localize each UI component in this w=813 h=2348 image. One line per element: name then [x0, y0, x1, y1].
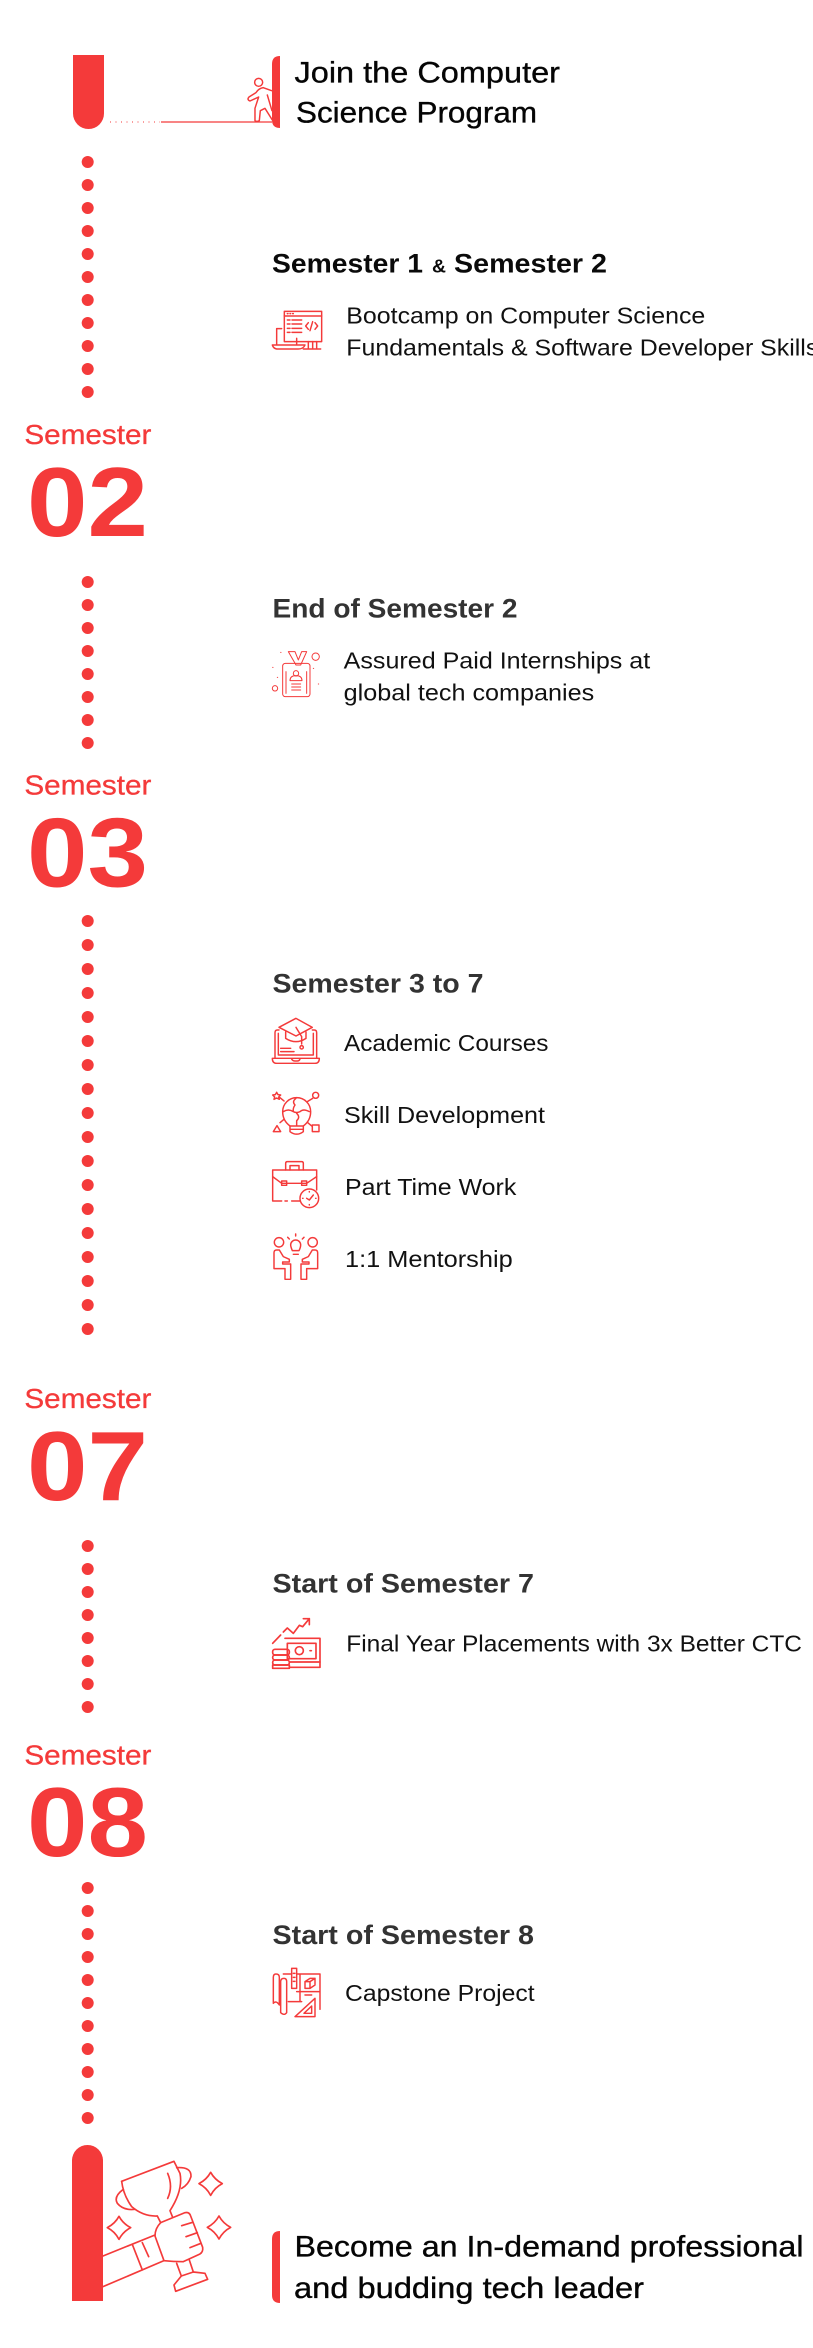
- description: Fundamentals & Software Developer Skills: [346, 335, 813, 361]
- timeline start cap: [73, 55, 104, 129]
- description: Capstone Project: [345, 1980, 535, 2006]
- icon: blueprint and set square: [273, 1968, 320, 2017]
- heading: Semester 3 to 7: [272, 969, 484, 999]
- icon: laptop with graduation cap: [272, 1018, 319, 1063]
- description: Assured Paid Internships at: [344, 647, 651, 673]
- panel: join the program: [73, 55, 560, 130]
- timeline end cap: [72, 2145, 103, 2301]
- connector line: [110, 121, 272, 123]
- heading: become an in-demand professional and budding tech leader: and budding tech leader: [294, 2272, 644, 2305]
- semester 08 marker: [24, 1739, 151, 1877]
- semester 02 marker: [24, 419, 151, 557]
- number: 08: [27, 1767, 148, 1877]
- number: 07: [27, 1411, 148, 1521]
- semester 03 marker: [24, 770, 151, 908]
- panel: start of semester 7: [272, 1569, 802, 1668]
- panel: semester 1 and semester 2: [272, 249, 813, 361]
- accent bar: [272, 56, 280, 128]
- heading: Start of Semester 7: [272, 1569, 534, 1599]
- accent bar: [272, 2231, 280, 2303]
- dotted timeline 4: [82, 1540, 94, 1713]
- number: 02: [27, 447, 148, 557]
- icon: briefcase with clock: [273, 1162, 319, 1208]
- item: 1:1 mentorship: 1:1 Mentorship: [345, 1246, 513, 1272]
- semester 07 marker: [24, 1383, 151, 1521]
- icon: id badge: [272, 652, 319, 697]
- label: Semester: [24, 1739, 151, 1770]
- icon: hand holding trophy: [103, 2161, 231, 2291]
- icon: person walking through door: [248, 78, 272, 121]
- icon: mentorship: [274, 1234, 318, 1279]
- icon: code window and laptop: [272, 311, 322, 349]
- heading: Semester 2: [454, 249, 607, 279]
- number: 03: [27, 798, 148, 908]
- dotted timeline 1: [82, 156, 94, 398]
- heading: End of Semester 2: [272, 593, 518, 623]
- panel: semester 3 to 7: [272, 969, 548, 1279]
- panel: become an in-demand professional: [72, 2145, 804, 2305]
- heading: join the computer science program: Join the Computer: [294, 57, 560, 90]
- panel: start of semester 8: [272, 1920, 535, 2017]
- description: Final Year Placements with 3x Better CTC: [346, 1631, 802, 1657]
- label: Semester: [24, 770, 151, 801]
- description: global tech companies: [344, 680, 594, 706]
- heading: &: [432, 257, 446, 277]
- description: Bootcamp on Computer Science: [346, 302, 705, 328]
- dotted timeline 3: [82, 915, 94, 1335]
- dotted timeline 5: [82, 1882, 94, 2124]
- icon: lightbulb with puzzle pieces: [273, 1092, 319, 1134]
- icon: money with growth arrow: [273, 1619, 320, 1668]
- label: Semester: [24, 1383, 151, 1414]
- heading: become an in-demand professional and budding tech leader: Become an In-demand professional: [294, 2231, 804, 2264]
- heading: Semester 1: [272, 249, 423, 279]
- heading: join the computer science program: Science Program: [296, 97, 537, 130]
- dotted timeline 2: [82, 576, 94, 749]
- item: skill development: Skill Development: [344, 1102, 545, 1128]
- item: academic courses: Academic Courses: [344, 1030, 548, 1056]
- label: Semester: [24, 419, 151, 450]
- item: part time work: Part Time Work: [345, 1174, 517, 1200]
- heading: Start of Semester 8: [272, 1920, 534, 1950]
- panel: end of semester 2: [272, 593, 651, 706]
